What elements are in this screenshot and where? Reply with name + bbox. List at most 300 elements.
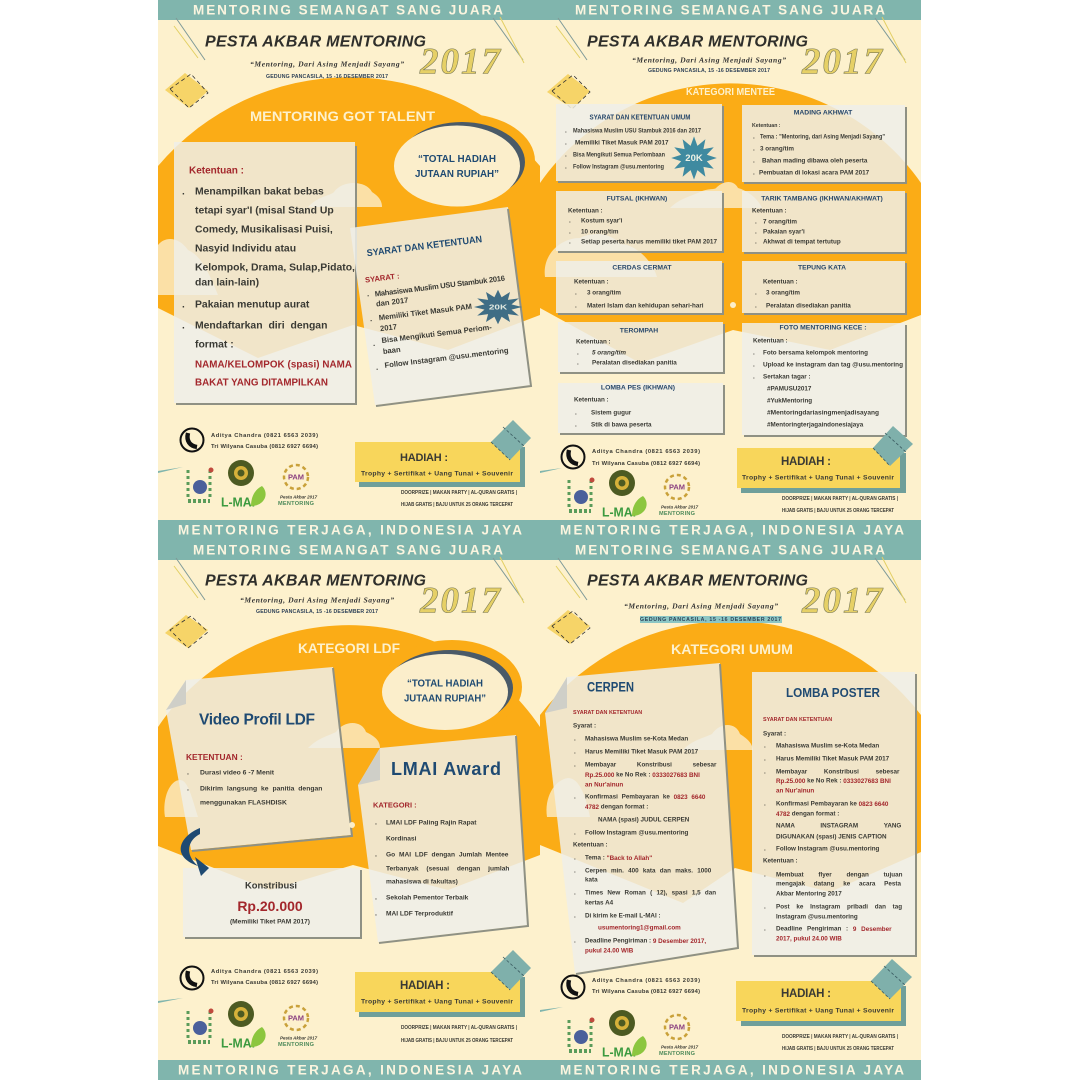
card: lomba poster: Follow Instagram @usu.mentoring bbox=[776, 846, 880, 852]
card: lmai award: Terbanyak (sesuai dengan jumlah bbox=[386, 866, 509, 872]
card: lomba poster: SYARAT DAN KETENTUAN bbox=[763, 717, 832, 723]
card: tarik tambang: TARIK TAMBANG (IKHWAN/AKHWAT) bbox=[761, 196, 883, 202]
card: cerpen: Times New Roman ( 12), spasi 1,5 dan bbox=[585, 890, 716, 896]
card: lomba pes: Ketentuan : bbox=[574, 396, 609, 404]
callout: total prize: JUTAAN RUPIAH” bbox=[404, 694, 486, 704]
decorative corner lines bbox=[174, 17, 524, 63]
bottom banner bbox=[540, 520, 921, 540]
card: lomba poster: Akbar Mentoring 2017 bbox=[776, 890, 842, 898]
orange semicircle backdrop bbox=[158, 625, 540, 890]
card: konstribusi: Rp.20.000 bbox=[237, 898, 303, 914]
card: lomba poster: 4782 dengan format : bbox=[776, 810, 839, 818]
top banner: MENTORING SEMANGAT SANG JUARA bbox=[575, 2, 885, 18]
card: cerpen: . bbox=[574, 854, 576, 862]
card: syarat dan ketentuan umum: Mahasiswa Muslim USU Stambuk 2016 dan 2017 bbox=[573, 128, 701, 134]
badge: 20K: 20K bbox=[685, 153, 703, 163]
card: foto mentoring kece: Sertakan tagar : bbox=[763, 374, 811, 380]
year 2017: 2017 bbox=[419, 580, 502, 622]
year 2017: 2017 bbox=[801, 580, 884, 622]
card: lomba poster: Rp.25.000 ke No Rek : 0333027683 BNI bbox=[776, 778, 891, 784]
card: tarik tambang: . bbox=[755, 218, 757, 226]
logo: PAM mentoring: MENTORING bbox=[659, 1051, 695, 1057]
panel: kategori ldf bbox=[158, 540, 540, 1080]
card: cerdas cermat: Materi Islam dan kehidupan sehari-hari bbox=[587, 302, 704, 310]
card: ketentuan: . bbox=[182, 186, 185, 198]
card: lomba poster: . bbox=[764, 800, 766, 808]
icon: yellow dashed diamond bbox=[165, 615, 208, 648]
panel background bbox=[540, 540, 921, 1080]
event title: PESTA AKBAR MENTORING bbox=[587, 34, 808, 50]
card: ketentuan: Mendaftarkan diri dengan bbox=[195, 320, 327, 332]
card: cerpen: . bbox=[574, 748, 576, 756]
bonus list: HIJAB GRATIS | BAJU UNTUK 25 ORANG TERCEPAT bbox=[401, 1038, 514, 1044]
card: syarat dan ketentuan umum: Bisa Mengikuti Semua Perlombaan bbox=[573, 152, 665, 158]
bonus list: DOORPRIZE | MAKAN PARTY | AL-QURAN GRATIS | bbox=[782, 496, 898, 502]
contact names bbox=[592, 449, 700, 467]
card: lmai award: . bbox=[375, 910, 377, 918]
bottom banner: MENTORING TERJAGA, INDONESIA JAYA bbox=[560, 1062, 904, 1078]
logo: left emblem bbox=[188, 468, 214, 501]
heading: KATEGORI LDF bbox=[298, 640, 400, 656]
card: cerpen: . bbox=[574, 736, 576, 742]
panel background bbox=[158, 540, 540, 1080]
logo: PAM mentoring: PAM bbox=[288, 1014, 304, 1022]
card: ketentuan: BAKAT YANG DITAMPILKAN bbox=[195, 378, 328, 388]
card: foto mentoring kece: Foto bersama kelompok mentoring bbox=[763, 350, 868, 356]
card: video profil ldf: . bbox=[187, 786, 189, 792]
logo: PAM mentoring: Pesta Akbar 2017 bbox=[661, 1044, 699, 1050]
card: video profil ldf: Durasi video 6 -7 Menit bbox=[200, 770, 275, 776]
card: syarat dan ketentuan umum: Follow Instagram @usu.mentoring bbox=[573, 164, 664, 170]
panel background bbox=[158, 0, 540, 540]
card: lomba pes bbox=[558, 383, 724, 434]
card: cerpen: Harus Memiliki Tiket Masuk PAM 2017 bbox=[585, 748, 699, 756]
card: foto mentoring kece: #PAMUSU2017 bbox=[767, 386, 812, 392]
card: lomba pes: Stik di bawa peserta bbox=[591, 422, 652, 428]
prize box: Trophy + Sertifikat + Uang Tunai + Souvenir bbox=[742, 1008, 894, 1014]
card: lmai award: LMAI LDF Paling Rajin Rapat bbox=[386, 820, 477, 826]
card: lomba poster: Mahasiswa Muslim se-Kota Medan bbox=[776, 742, 879, 750]
callout: total prize: JUTAAN RUPIAH” bbox=[415, 168, 499, 180]
card: cerpen bbox=[545, 663, 738, 974]
prize box bbox=[736, 959, 912, 1026]
card: video profil ldf: KETENTUAN : bbox=[186, 752, 243, 762]
icon: yellow dashed diamond bbox=[547, 74, 590, 109]
card: foto mentoring kece bbox=[742, 323, 906, 436]
card: ketentuan bbox=[174, 142, 356, 404]
panel: mentoring got talent bbox=[158, 0, 540, 540]
card: cerpen: Follow Instagram @usu.mentoring bbox=[585, 830, 689, 836]
card: terompah: . bbox=[577, 350, 579, 356]
logo: L-MAI bbox=[602, 1010, 647, 1060]
card: tarik tambang: Akhwat di tempat tertutup bbox=[763, 238, 841, 246]
card: konstribusi: (Memiliki Tiket PAM 2017) bbox=[230, 918, 310, 926]
card: tepung kata: Ketentuan : bbox=[763, 278, 798, 286]
card: tepung kata: . bbox=[755, 302, 757, 310]
top banner bbox=[158, 540, 540, 560]
card: futsal: Kostum syar'i bbox=[581, 218, 623, 224]
card: lmai award: Sekolah Pementor Terbaik bbox=[386, 894, 469, 902]
event title: PESTA AKBAR MENTORING bbox=[587, 572, 808, 590]
card: ketentuan: tetapi syar'I (misal Stand Up bbox=[195, 206, 334, 216]
card: video profil ldf bbox=[166, 667, 352, 851]
card: syarat dan ketentuan: baan bbox=[382, 345, 401, 356]
callout: total prize: “TOTAL HADIAH bbox=[418, 153, 496, 165]
card: cerdas cermat bbox=[556, 261, 723, 314]
logo: PAM mentoring: Pesta Akbar 2017 bbox=[280, 494, 318, 500]
bottom banner bbox=[158, 1060, 540, 1080]
venue and date: GEDUNG PANCASILA, 15 -16 DESEMBER 2017 bbox=[266, 74, 388, 80]
teal streak bbox=[540, 1007, 563, 1012]
card: syarat dan ketentuan umum: . bbox=[565, 152, 567, 158]
card: futsal bbox=[556, 191, 723, 252]
card: syarat dan ketentuan umum: SYARAT DAN KETENTUAN UMUM bbox=[590, 114, 691, 122]
prize box: Trophy + Sertifikat + Uang Tunai + Souvenir bbox=[361, 470, 513, 478]
card: lomba poster: Membayar Konstribusi sebesar bbox=[776, 768, 900, 776]
bottom banner: MENTORING TERJAGA, INDONESIA JAYA bbox=[560, 522, 904, 538]
card: cerpen: Tema : "Back to Allah" bbox=[585, 854, 652, 862]
card: tepung kata: Peralatan disediakan panitia bbox=[766, 302, 851, 310]
card: ketentuan: dan lain-lain) bbox=[195, 278, 259, 288]
heading: KATEGORI UMUM bbox=[671, 641, 793, 657]
contact names: Aditya Chandra (0821 6563 2039) bbox=[211, 969, 318, 975]
card: terompah: 5 orang/tim bbox=[592, 350, 626, 356]
logo: left emblem bbox=[569, 1018, 594, 1051]
card: syarat dan ketentuan: . bbox=[369, 314, 373, 323]
logo: left emblem bbox=[569, 478, 594, 511]
card: konstribusi bbox=[183, 868, 361, 938]
card: lmai award: . bbox=[375, 894, 377, 902]
card: ketentuan: NAMA/KELOMPOK (spasi) NAMA bbox=[195, 360, 352, 370]
card: terompah: Peralatan disediakan panitia bbox=[592, 360, 677, 366]
orange semicircle backdrop bbox=[158, 77, 540, 358]
decorative corner lines bbox=[556, 557, 906, 603]
tagline: “Mentoring, Dari Asing Menjadi Sayang” bbox=[632, 56, 786, 64]
contact names: Aditya Chandra (0821 6563 2039) bbox=[211, 433, 318, 439]
card: cerpen: . bbox=[574, 830, 576, 836]
card: video profil ldf: Video Profil LDF bbox=[199, 712, 315, 728]
card: futsal: . bbox=[569, 228, 571, 236]
top banner bbox=[158, 0, 540, 20]
card: cerpen: Rp.25.000 ke No Rek : 0333027683 BNI bbox=[585, 772, 700, 778]
card: lomba pes: . bbox=[575, 410, 577, 416]
heading: MENTORING GOT TALENT bbox=[250, 108, 435, 124]
card: cerpen: . bbox=[574, 794, 576, 800]
orange semicircle backdrop bbox=[540, 621, 921, 903]
card: ketentuan: . bbox=[182, 320, 185, 332]
card: lmai award: Kordinasi bbox=[386, 836, 417, 842]
card: lomba poster: . bbox=[764, 904, 766, 910]
card: tarik tambang bbox=[742, 191, 906, 253]
card: syarat dan ketentuan: . bbox=[366, 289, 370, 298]
card: syarat dan ketentuan: Follow Instagram @usu.mentoring bbox=[384, 346, 509, 370]
card: syarat dan ketentuan: SYARAT : bbox=[365, 271, 400, 285]
card: syarat dan ketentuan umum bbox=[556, 104, 723, 182]
clouds bbox=[158, 183, 382, 295]
card: cerpen: Cerpen min. 400 kata dan maks. 1000 bbox=[585, 868, 712, 874]
logo: L-MAI bbox=[221, 1001, 266, 1050]
card: mading akhwat bbox=[742, 105, 906, 183]
card: mading akhwat: . bbox=[753, 134, 755, 140]
badge: 20K bbox=[474, 290, 522, 324]
card: lmai award: mahasiswa di fakultas) bbox=[386, 878, 458, 886]
card: cerdas cermat: Ketentuan : bbox=[574, 278, 609, 286]
card: mading akhwat: Pembuatan di lokasi acara PAM 2017 bbox=[759, 170, 870, 176]
top banner: MENTORING SEMANGAT SANG JUARA bbox=[193, 542, 503, 558]
card: ketentuan: Ketentuan : bbox=[189, 166, 244, 176]
card: lomba poster: . bbox=[764, 872, 766, 878]
orange semicircle backdrop bbox=[540, 83, 921, 363]
card: lmai award: LMAI Award bbox=[391, 759, 501, 779]
bonus list: HIJAB GRATIS | BAJU UNTUK 25 ORANG TERCEPAT bbox=[782, 508, 895, 514]
card: lomba pes: LOMBA PES (IKHWAN) bbox=[601, 384, 675, 392]
card: terompah bbox=[558, 322, 724, 373]
teal streak bbox=[158, 467, 183, 473]
card: mading akhwat: Ketentuan : bbox=[752, 123, 781, 129]
venue and date: GEDUNG PANCASILA, 15 -16 DESEMBER 2017 bbox=[648, 68, 770, 74]
card: mading akhwat: . bbox=[753, 170, 755, 176]
contact names: Tri Wilyana Casuba (0812 6927 6694) bbox=[211, 980, 318, 986]
card: lomba poster: mengajak datang ke acara Pesta bbox=[776, 880, 901, 888]
prize box: Trophy + Sertifikat + Uang Tunai + Souvenir bbox=[361, 998, 513, 1006]
bottom banner bbox=[158, 520, 540, 540]
top banner: MENTORING SEMANGAT SANG JUARA bbox=[575, 542, 885, 558]
card: lomba poster: Instagram @usu.mentoring bbox=[776, 914, 858, 920]
contact names bbox=[592, 978, 700, 995]
card: tarik tambang: . bbox=[755, 228, 757, 236]
card: tarik tambang: Ketentuan : bbox=[752, 208, 787, 214]
card: syarat dan ketentuan umum: . bbox=[565, 140, 567, 146]
card: foto mentoring kece: #YukMentoring bbox=[767, 398, 812, 404]
tagline: “Mentoring, Dari Asing Menjadi Sayang” bbox=[624, 602, 778, 610]
card: ketentuan: Menampilkan bakat bebas bbox=[195, 186, 324, 198]
bonus list bbox=[782, 496, 898, 514]
card: futsal: Ketentuan : bbox=[568, 208, 603, 214]
bottom banner bbox=[540, 1060, 921, 1080]
decorative corner lines bbox=[174, 557, 524, 603]
prize box bbox=[355, 950, 531, 1017]
card: syarat dan ketentuan umum: . bbox=[565, 164, 567, 170]
card: lomba poster: . bbox=[764, 846, 766, 852]
card: syarat dan ketentuan: 2017 bbox=[380, 322, 397, 333]
contact names: Aditya Chandra (0821 6563 2039) bbox=[592, 978, 700, 984]
card: mading akhwat: MADING AKHWAT bbox=[794, 110, 853, 116]
card: cerpen: Deadline Pengiriman : 9 Desember 2017, bbox=[585, 938, 706, 944]
card: cerpen: NAMA (spasi) JUDUL CERPEN bbox=[598, 816, 690, 824]
card: cerpen: pukul 24.00 WIB bbox=[585, 948, 634, 954]
card: futsal: 10 orang/tim bbox=[581, 228, 619, 236]
card: ketentuan: . bbox=[182, 300, 185, 310]
bonus list: HIJAB GRATIS | BAJU UNTUK 25 ORANG TERCEPAT bbox=[401, 502, 514, 508]
card: foto mentoring kece: . bbox=[753, 374, 755, 380]
teal streak bbox=[158, 998, 183, 1003]
year 2017: 2017 bbox=[801, 42, 884, 82]
contact names bbox=[211, 433, 318, 450]
card: video profil ldf: Dikirim langsung ke panitia dengan bbox=[200, 786, 322, 792]
prize box: HADIAH : bbox=[400, 452, 448, 464]
card: cerdas cermat: 3 orang/tim bbox=[587, 290, 621, 296]
card: lomba poster: Deadline Pengiriman : 9 Desember bbox=[776, 926, 892, 932]
card: futsal: . bbox=[569, 218, 571, 224]
card: lomba poster: Konfirmasi Pembayaran ke 0823 6640 bbox=[776, 800, 889, 808]
clouds bbox=[545, 182, 762, 277]
card: lomba poster: Post ke Instagram pribadi dan tag bbox=[776, 904, 902, 910]
card: syarat dan ketentuan: . bbox=[375, 363, 379, 372]
card: cerpen: Ketentuan : bbox=[573, 842, 608, 848]
card: tepung kata: TEPUNG KATA bbox=[798, 264, 846, 272]
card: tepung kata: . bbox=[755, 290, 757, 296]
card: syarat dan ketentuan: SYARAT DAN KETENTUAN bbox=[366, 234, 483, 259]
card: tepung kata: 3 orang/tim bbox=[766, 290, 800, 296]
card: lomba poster: 2017, pukul 24.00 WIB bbox=[776, 936, 842, 942]
card: tarik tambang: . bbox=[755, 238, 757, 246]
card: lmai award: . bbox=[375, 820, 377, 826]
prize box bbox=[737, 426, 913, 493]
logo: PAM mentoring: MENTORING bbox=[278, 1042, 314, 1048]
card: video profil ldf: . bbox=[187, 770, 189, 776]
card: syarat dan ketentuan: . bbox=[372, 339, 376, 348]
card: lomba poster: Syarat : bbox=[763, 730, 786, 738]
card: lomba pes: . bbox=[575, 422, 577, 428]
card: cerpen: 4782 dengan format : bbox=[585, 804, 648, 810]
contact: phone bbox=[180, 428, 204, 452]
callout: total prize bbox=[382, 640, 522, 734]
icon: yellow dashed diamond bbox=[547, 610, 590, 644]
teal streak bbox=[540, 468, 562, 473]
card: syarat dan ketentuan: Memiliki Tiket Masuk PAM bbox=[378, 302, 472, 322]
card: cerpen: an Nur'ainun bbox=[585, 782, 623, 788]
card: lomba poster: LOMBA POSTER bbox=[786, 686, 880, 700]
logo: PAM mentoring bbox=[659, 475, 699, 517]
logo: PAM mentoring: Pesta Akbar 2017 bbox=[661, 504, 699, 510]
clouds bbox=[546, 725, 753, 817]
card: foto mentoring kece: Ketentuan : bbox=[753, 338, 788, 344]
logo: PAM mentoring: Pesta Akbar 2017 bbox=[280, 1036, 318, 1040]
card: lomba poster bbox=[752, 672, 916, 956]
card: lomba poster: Harus Memiliki Tiket Masuk PAM 2017 bbox=[776, 756, 890, 762]
logo: L-MAI: L-MAI bbox=[221, 1036, 255, 1050]
card: cerpen: kata bbox=[585, 876, 598, 884]
decorative dot bbox=[730, 302, 736, 308]
card: video profil ldf: menggunakan FLASHDISK bbox=[200, 800, 287, 806]
card: syarat dan ketentuan: Mahasiswa Muslim USU Stambuk 2016 bbox=[374, 274, 505, 299]
card: cerpen: . bbox=[574, 938, 576, 944]
card: mading akhwat: Tema : "Mentoring, dari Asing Menjadi Sayang" bbox=[760, 134, 885, 140]
bonus list bbox=[401, 490, 517, 508]
contact: phone bbox=[180, 966, 204, 990]
panel: kategori mentee bbox=[540, 0, 921, 540]
badge: 20K bbox=[671, 136, 717, 180]
bottom banner: MENTORING TERJAGA, INDONESIA JAYA bbox=[178, 522, 522, 538]
event title: PESTA AKBAR MENTORING bbox=[205, 572, 426, 590]
tagline: “Mentoring, Dari Asing Menjadi Sayang” bbox=[240, 596, 394, 604]
card: lomba poster: Ketentuan : bbox=[763, 858, 798, 864]
logo: PAM mentoring bbox=[278, 1006, 318, 1048]
top banner: MENTORING SEMANGAT SANG JUARA bbox=[193, 2, 503, 18]
contact names: Aditya Chandra (0821 6563 2039) bbox=[592, 449, 700, 455]
card: cerpen: . bbox=[574, 868, 576, 874]
contact names: Tri Wilyana Casuba (0812 6927 6694) bbox=[592, 989, 700, 995]
card: cerpen: Syarat : bbox=[573, 722, 596, 730]
callout: total prize bbox=[394, 114, 535, 208]
card: ketentuan: Comedy, Musikalisasi Puisi, bbox=[195, 224, 333, 236]
logo: PAM mentoring bbox=[659, 1015, 699, 1057]
card: lomba poster: . bbox=[764, 768, 766, 776]
card: futsal: FUTSAL (IKHWAN) bbox=[607, 196, 667, 202]
card: mading akhwat: 3 orang/tim bbox=[760, 146, 794, 152]
card: tarik tambang: 7 orang/tim bbox=[763, 218, 797, 226]
logo: PAM mentoring bbox=[278, 465, 318, 507]
heading: KATEGORI MENTEE bbox=[686, 86, 775, 98]
card: terompah: Ketentuan : bbox=[576, 338, 611, 346]
prize box bbox=[355, 420, 531, 487]
bottom banner: MENTORING TERJAGA, INDONESIA JAYA bbox=[178, 1062, 522, 1078]
card: foto mentoring kece: FOTO MENTORING KECE : bbox=[780, 324, 866, 332]
card: syarat dan ketentuan bbox=[350, 207, 531, 406]
card: syarat dan ketentuan umum: Memiliki Tiket Masuk PAM 2017 bbox=[575, 140, 669, 146]
card: terompah: TEROMPAH bbox=[620, 328, 658, 334]
card: cerpen: CERPEN bbox=[587, 680, 634, 694]
card: cerpen: . bbox=[574, 912, 576, 920]
bonus list: DOORPRIZE | MAKAN PARTY | AL-QURAN GRATIS | bbox=[782, 1034, 898, 1040]
card: lmai award: MAI LDF Terproduktif bbox=[386, 910, 454, 918]
panel: kategori umum bbox=[540, 540, 921, 1080]
icon: yellow dashed diamond bbox=[165, 73, 208, 108]
card: cerpen: . bbox=[574, 890, 576, 896]
card: ketentuan: Kelompok, Drama, Sulap,Pidato, bbox=[195, 262, 355, 274]
card: lomba poster: . bbox=[764, 926, 766, 932]
card: foto mentoring kece: #Mentoringterjagaindonesiajaya bbox=[767, 422, 864, 428]
contact names: Tri Wilyana Casuba (0812 6927 6694) bbox=[211, 444, 318, 450]
logo: L-MAI bbox=[221, 460, 266, 510]
contact: phone bbox=[562, 976, 584, 998]
event title: PESTA AKBAR MENTORING bbox=[205, 34, 426, 50]
card: mading akhwat: . bbox=[753, 146, 755, 152]
logo: PAM mentoring: MENTORING bbox=[278, 501, 314, 507]
card: lomba poster: NAMA INSTAGRAM YANG bbox=[776, 822, 901, 830]
card: cerpen: SYARAT DAN KETENTUAN bbox=[573, 710, 642, 716]
card: foto mentoring kece: #Mentoringdariasingmenjadisayang bbox=[767, 410, 879, 416]
top banner bbox=[540, 0, 921, 20]
logo: PAM mentoring: PAM bbox=[669, 482, 685, 492]
card: syarat dan ketentuan umum: . bbox=[565, 128, 567, 134]
card: futsal: . bbox=[569, 238, 571, 246]
card: lmai award: Go MAI LDF dengan Jumlah Mentee bbox=[386, 852, 509, 858]
logo: L-MAI bbox=[602, 470, 647, 520]
decorative dot bbox=[349, 822, 355, 828]
logo: L-MAI: L-MAI bbox=[221, 494, 255, 510]
logo: PAM mentoring: MENTORING bbox=[659, 511, 695, 517]
top banner bbox=[540, 540, 921, 560]
card: futsal: Setiap peserta harus memiliki tiket PAM 2017 bbox=[581, 238, 718, 246]
card: tarik tambang: Pakaian syar'i bbox=[763, 228, 805, 236]
decorative corner lines bbox=[556, 17, 906, 63]
venue and date: GEDUNG PANCASILA, 15 -16 DESEMBER 2017 bbox=[256, 609, 378, 615]
logo: PAM mentoring: PAM bbox=[669, 1022, 685, 1032]
card: syarat dan ketentuan: Bisa Mengikuti Semua Periom- bbox=[381, 323, 493, 345]
card: ketentuan: Nasyid Individu atau bbox=[195, 244, 296, 254]
logo: L-MAI: L-MAI bbox=[602, 1044, 636, 1060]
card: cerpen: Konfirmasi Pembayaran ke 0823 6640 bbox=[585, 794, 706, 800]
card: ketentuan: Pakaian menutup aurat bbox=[195, 300, 310, 310]
card: cerpen: . bbox=[574, 762, 576, 768]
year 2017: 2017 bbox=[419, 42, 502, 82]
prize box: Trophy + Sertifikat + Uang Tunai + Souvenir bbox=[742, 474, 894, 482]
prize box: HADIAH : bbox=[781, 988, 831, 1000]
prize box: HADIAH : bbox=[400, 980, 450, 992]
card: cerpen: kertas A4 bbox=[585, 900, 614, 906]
clouds bbox=[164, 723, 380, 817]
